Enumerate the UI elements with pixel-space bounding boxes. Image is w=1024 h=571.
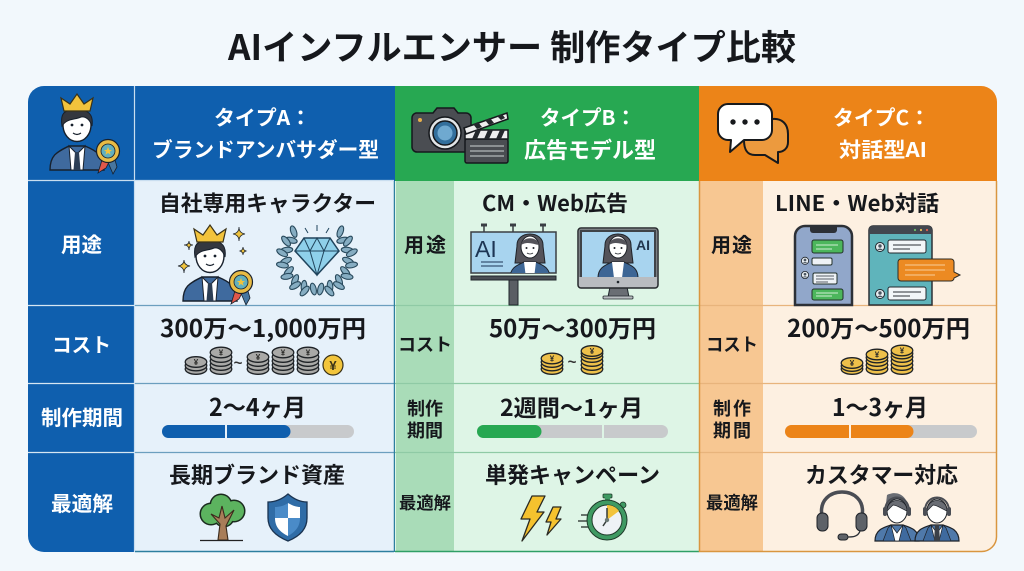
value: cost B: 50万〜300万円 (489, 309, 656, 344)
icon: coin stacks C: ¥ (900, 346, 905, 356)
icon: coin stacks A: ¥ (281, 348, 286, 358)
icon: stopwatch (578, 494, 627, 540)
icon: coin stacks A (185, 347, 343, 375)
header: type C (833, 101, 930, 163)
label: period: 制作 (407, 395, 443, 421)
value: best fit C: カスタマー対応 (805, 458, 958, 490)
header: type B: 広告モデル型 (524, 133, 656, 165)
icon: character with sparkles (178, 225, 252, 305)
icon: coin stacks A: ¥ (256, 353, 261, 362)
label: best fit: 最適解 (706, 490, 758, 515)
value: cost C: 200万〜500万円 (787, 309, 970, 344)
icon: coin stacks B: ~ (568, 354, 577, 371)
icon: coin stacks A: ¥ (306, 348, 311, 358)
label: cost: コスト (706, 331, 758, 357)
value: use B: CM・Web広告 (482, 187, 628, 218)
header: type C: 対話型AI (839, 133, 927, 163)
icon: chat window (869, 226, 960, 305)
icon: shield (268, 494, 307, 541)
label: use: 用途 (61, 228, 102, 258)
label: period: 制作期間 (41, 401, 123, 431)
label: cost: コスト (52, 329, 111, 358)
value: best fit B: 単発キャンペーン (485, 458, 660, 490)
icon: diamond with laurel wreath (275, 223, 359, 301)
label: period (713, 395, 751, 443)
icon: coin stacks C (841, 345, 913, 374)
label: period: 期間 (713, 417, 751, 443)
icon: coin stacks C: ¥ (875, 350, 880, 360)
value: period A: 2〜4ヶ月 (209, 388, 306, 423)
title: AIインフルエンサー 制作タイプ比較 (227, 20, 796, 71)
bar: period C (785, 425, 977, 438)
value: best fit A: 長期ブランド資産 (169, 458, 345, 490)
icon: smartphone chat (795, 226, 852, 305)
value: cost A: 300万〜1,000万円 (160, 309, 366, 344)
header: type A: タイプA： (214, 101, 311, 131)
icon: lightning bolts (521, 496, 561, 541)
label: period (407, 395, 443, 443)
icon: billboard (471, 225, 556, 305)
value: use A: 自社専用キャラクター (159, 187, 376, 218)
icon: coin stacks B (541, 346, 603, 374)
icon: female operator (875, 493, 919, 541)
label: best fit: 最適解 (399, 489, 451, 514)
icon: coin stacks B: ¥ (590, 347, 595, 356)
bar: period B (477, 425, 668, 438)
panel: type C (699, 86, 997, 552)
header: type B (524, 101, 656, 165)
icon: tree (200, 495, 244, 540)
icon: coin stacks A: ¥ (329, 358, 337, 373)
panel: type B (395, 86, 699, 552)
panel: type A (28, 86, 395, 552)
icon: monitor: AI (636, 237, 650, 253)
icon: ambassador with crown (50, 94, 120, 174)
icon: coin stacks A: ¥ (194, 358, 199, 367)
icon: coin stacks C: ¥ (850, 359, 855, 368)
label: period: 期間 (407, 417, 443, 443)
value: period B: 2週間〜1ヶ月 (500, 389, 643, 423)
icon: monitor (578, 228, 658, 299)
value: period C: 1〜3ヶ月 (832, 388, 928, 423)
label: use: 用途 (711, 229, 752, 258)
icon: coin stacks A: ¥ (219, 348, 224, 358)
header: type A: ブランドアンバサダー型 (152, 133, 379, 163)
header: type B: タイプB： (540, 101, 636, 131)
icon: camera and clapperboard (412, 108, 508, 163)
label: best fit: 最適解 (51, 487, 113, 517)
bar: period A (162, 425, 354, 438)
header: type C: タイプC： (833, 101, 930, 131)
icon: chat bubbles (718, 104, 788, 163)
icon: coin stacks B: ¥ (550, 354, 555, 364)
icon: male operator (915, 498, 959, 541)
icon: headset (817, 492, 867, 540)
label: use: 用途 (404, 229, 446, 258)
header: type A (152, 101, 379, 163)
value: use C: LINE・Web対話 (775, 187, 939, 218)
label: cost: コスト (398, 331, 452, 357)
label: period: 制作 (713, 395, 751, 421)
icon: coin stacks A: ~ (234, 355, 243, 372)
icon: billboard: AI (475, 236, 497, 262)
